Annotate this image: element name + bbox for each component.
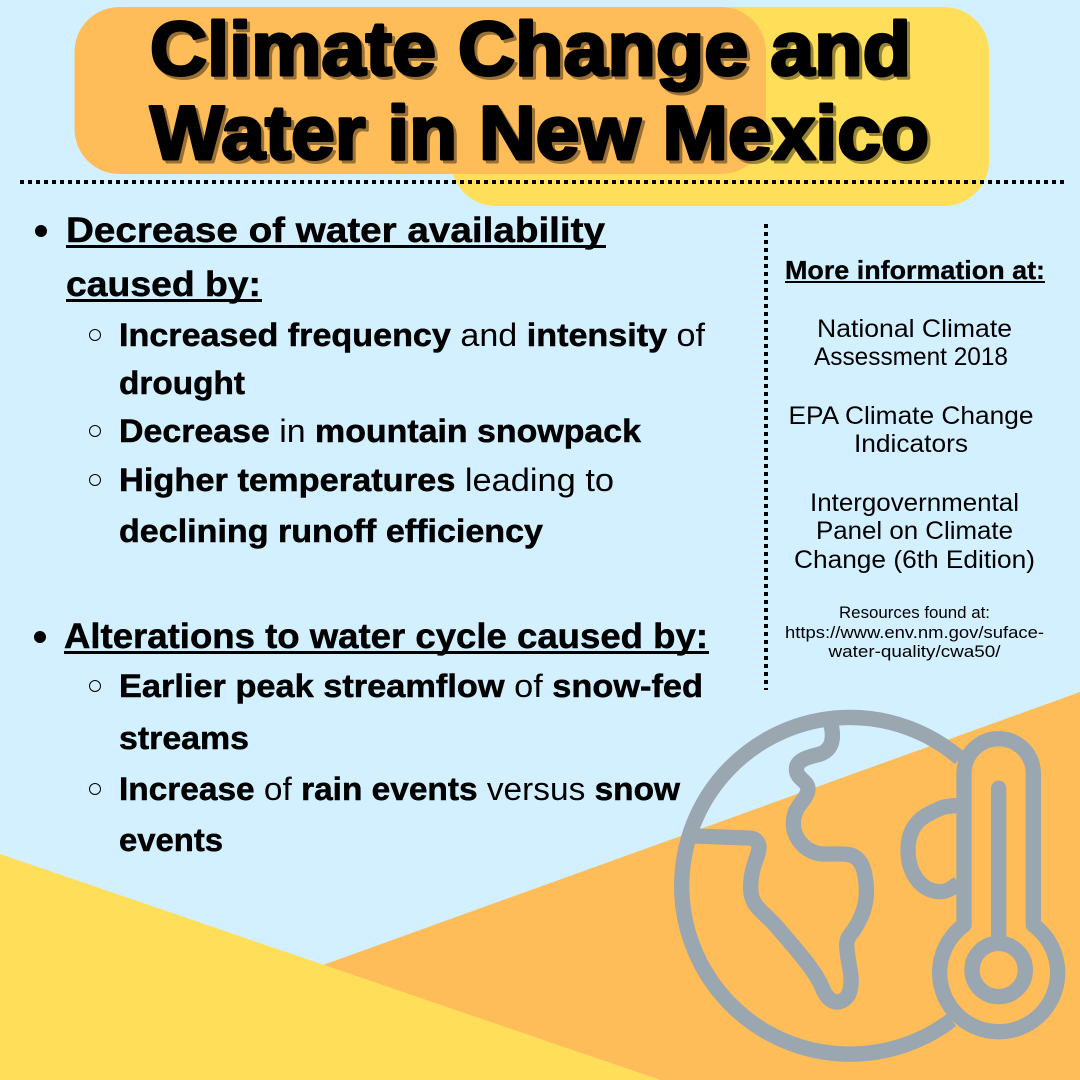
sub-bullet: drought: drought xyxy=(119,365,245,401)
panel heading: More information at: xyxy=(785,255,1045,285)
source: IPCC: Intergovernmental xyxy=(810,489,1019,517)
sub-bullet: streamflow: Earlier peak streamflow of snow-fed xyxy=(119,668,703,704)
sub-bullet: temperatures: declining runoff efficiency xyxy=(119,513,543,549)
thermometer column xyxy=(976,788,1022,943)
title: Water in New Mexico xyxy=(150,91,929,176)
sub-bullet: rain events: Increase of rain events versus snow xyxy=(119,771,680,807)
bullet xyxy=(35,225,47,237)
title banner: yellow xyxy=(451,7,989,206)
title: Climate Change and xyxy=(153,10,914,95)
source: EPA: EPA Climate Change xyxy=(788,402,1034,430)
source: IPCC xyxy=(794,489,1035,574)
sub-bullet: drought xyxy=(90,317,705,401)
sub-bullet: rain events xyxy=(90,771,680,858)
bullet xyxy=(34,631,46,643)
globe outline xyxy=(682,717,960,1054)
background: orange wedge xyxy=(323,692,1080,1080)
title xyxy=(150,7,932,179)
source: EPA xyxy=(788,402,1034,458)
thermometer body xyxy=(940,739,1058,1032)
source: national climate assessment xyxy=(814,315,1012,371)
background: yellow wedge xyxy=(0,854,660,1080)
icon: globe with thermometer xyxy=(682,717,1058,1054)
sub-bullet: streamflow: streams xyxy=(119,720,249,756)
section: decrease of water availability xyxy=(35,211,705,549)
resources note: water-quality/cwa50/ xyxy=(827,642,1001,661)
source: national climate assessment: Assessment 2018 xyxy=(814,343,1008,371)
resources note: Resources found at: xyxy=(839,603,990,622)
section heading: caused by: xyxy=(66,265,261,304)
resources note xyxy=(785,603,1044,661)
section heading: Decrease of water availability xyxy=(66,211,606,250)
sub-bullet: streamflow xyxy=(90,668,703,756)
source: EPA: Indicators xyxy=(854,430,968,458)
resources note: https://www.env.nm.gov/suface- xyxy=(785,623,1044,642)
title banner: orange xyxy=(74,7,766,174)
sub-bullet: temperatures: Higher temperatures leading to xyxy=(119,462,614,498)
title: Water in New Mexico xyxy=(153,94,932,179)
title: Climate Change and xyxy=(150,7,911,92)
sub-bullet: rain events: events xyxy=(119,822,223,858)
continent xyxy=(695,723,866,1002)
section heading: Alterations to water cycle caused by: xyxy=(64,617,708,656)
thermometer bulb xyxy=(972,943,1025,997)
source: national climate assessment: National Climate xyxy=(817,315,1012,343)
panel: more information xyxy=(785,255,1045,661)
source: IPCC: Change (6th Edition) xyxy=(794,546,1035,574)
section heading xyxy=(66,211,606,304)
sub-bullet: drought: Increased frequency and intensity of xyxy=(119,317,705,353)
landmass beside thermometer xyxy=(908,806,958,892)
sub-bullet: snowpack: Decrease in mountain snowpack xyxy=(119,413,641,449)
sub-bullet: temperatures xyxy=(90,462,614,549)
section: alterations to water cycle xyxy=(34,617,709,858)
source: IPCC: Panel on Climate xyxy=(816,517,1013,545)
